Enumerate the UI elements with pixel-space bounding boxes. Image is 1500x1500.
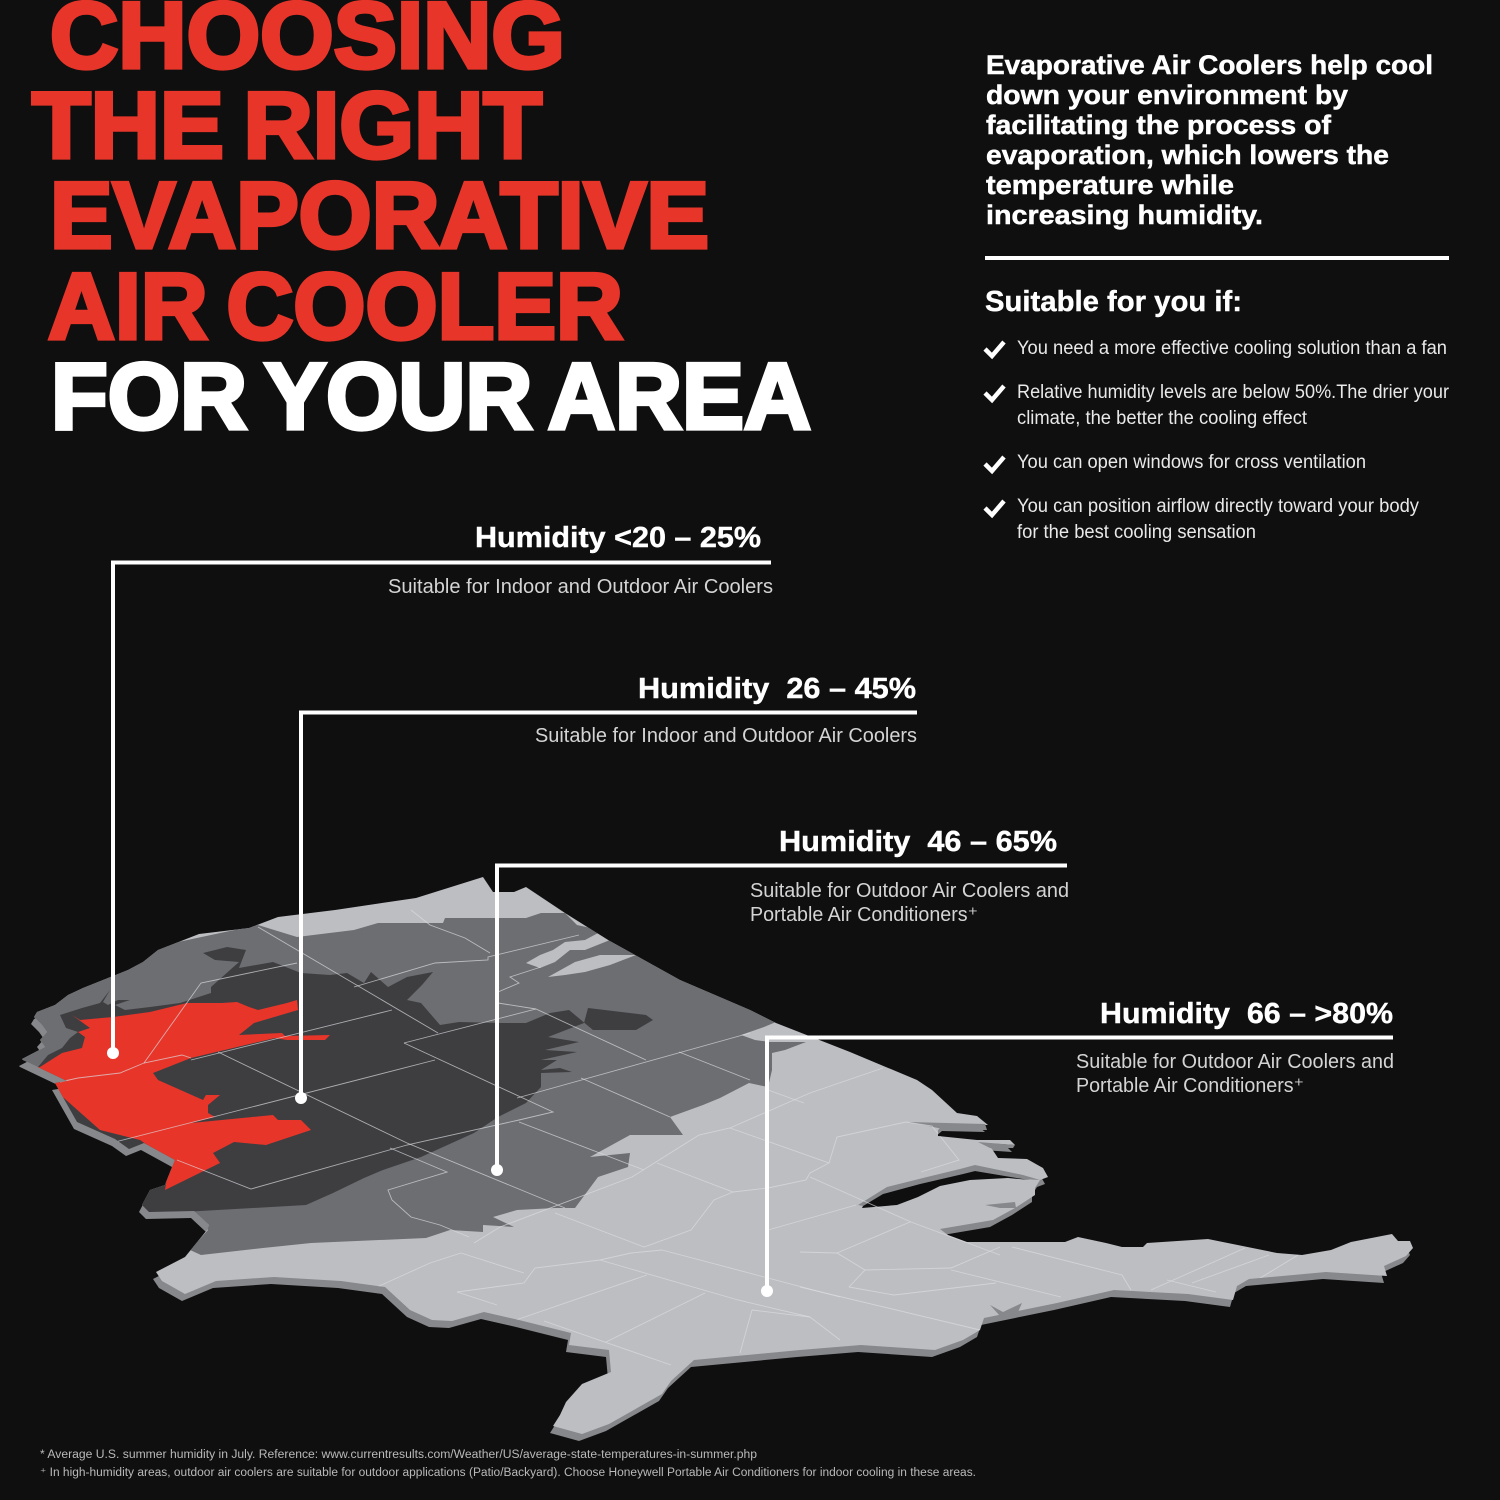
callout: humidity under 25: Humidity <20 – 25% xyxy=(475,522,761,554)
intro paragraph: evaporation, which lowers the xyxy=(986,140,1389,170)
map zone: humidity below 25 xyxy=(30,1000,330,1190)
intro paragraph: temperature while xyxy=(986,170,1234,200)
humidity map xyxy=(0,877,1413,1441)
map peninsula shadows xyxy=(908,1122,1016,1208)
map land: highest humidity zone xyxy=(22,877,1413,1434)
checklist item 4 xyxy=(985,496,1419,543)
checklist item 4: You can position airflow directly toward your body xyxy=(1017,496,1419,517)
checklist item 4: for the best cooling sensation xyxy=(1017,522,1256,543)
title: AIR COOLER xyxy=(48,254,623,358)
title: THE RIGHT xyxy=(32,72,542,178)
title: EVAPORATIVE xyxy=(50,162,709,268)
checklist item 2: Relative humidity levels are below 50%.The drier your xyxy=(1017,382,1450,403)
map patches: lighter lake areas xyxy=(526,932,636,977)
title: FOR YOUR AREA xyxy=(51,344,811,448)
map state borders xyxy=(60,910,1298,1365)
callout: humidity 46-65 xyxy=(491,826,1069,1176)
callout: humidity under 25 xyxy=(107,522,773,1059)
footnotes: ⁺ In high-humidity areas, outdoor air coolers are suitable for outdoor applications (Patio/Backyard). Choose Honeywell Portable Air Conditioners for indoor cooling in these areas. xyxy=(40,1467,976,1479)
intro paragraph: facilitating the process of xyxy=(986,110,1332,140)
checklist item 2 xyxy=(985,382,1450,429)
callout: humidity under 25: Suitable for Indoor and Outdoor Air Coolers xyxy=(388,576,773,598)
footnotes: * Average U.S. summer humidity in July. Reference: www.currentresults.com/Weather/US/average-state-temperatures-in-summer.php xyxy=(40,1449,757,1461)
callout: humidity 26-45: Suitable for Indoor and Outdoor Air Coolers xyxy=(535,725,917,747)
map zone: humidity 26-45 xyxy=(30,947,653,1215)
footnotes xyxy=(40,1449,976,1479)
callout: humidity 66-80: Humidity 66 – >80% xyxy=(1100,998,1393,1030)
intro paragraph: increasing humidity. xyxy=(986,200,1263,230)
subheading: Suitable for you if: xyxy=(985,286,1242,318)
checklist item 2: climate, the better the cooling effect xyxy=(1017,408,1308,429)
callout: humidity 26-45 xyxy=(295,673,917,1104)
callout: humidity 46-65: Portable Air Conditioners⁺ xyxy=(750,904,978,926)
map extrusion xyxy=(19,884,1410,1441)
callout: humidity 66-80: Portable Air Conditioners⁺ xyxy=(1076,1075,1304,1097)
panel: suitable for you if xyxy=(985,286,1450,543)
callout: humidity 26-45: Humidity 26 – 45% xyxy=(638,673,916,705)
callout: humidity 66-80: Suitable for Outdoor Air Coolers and xyxy=(1076,1051,1394,1073)
callout: humidity 46-65: Humidity 46 – 65% xyxy=(779,826,1057,858)
map chesapeake bay xyxy=(990,1303,1022,1322)
map zone: humidity 46-65 xyxy=(0,913,806,1255)
callout: humidity 46-65: Suitable for Outdoor Air Coolers and xyxy=(750,880,1069,902)
intro paragraph: Evaporative Air Coolers help cool xyxy=(986,50,1433,80)
title xyxy=(32,0,811,448)
intro paragraph: down your environment by xyxy=(986,80,1348,110)
checklist item 3: You can open windows for cross ventilation xyxy=(1017,452,1366,473)
map lake michigan xyxy=(858,1165,1040,1208)
callout: humidity 66-80 xyxy=(761,998,1394,1297)
intro paragraph xyxy=(986,50,1433,230)
checklist item 1: You need a more effective cooling solution than a fan xyxy=(1017,338,1447,359)
